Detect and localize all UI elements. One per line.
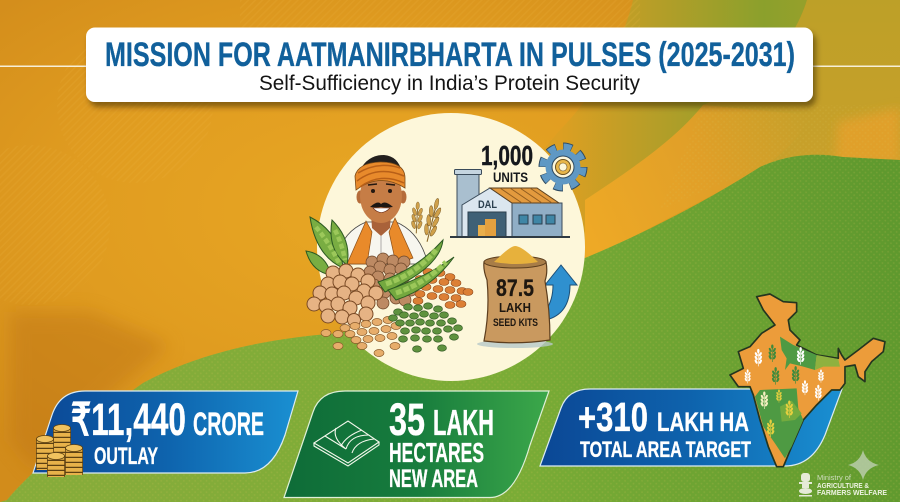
hectares label: HECTARES <box>389 437 484 468</box>
map: green southern zone <box>755 388 803 458</box>
seed kit label: SEED KITS <box>493 317 538 329</box>
map: light green central patch <box>780 401 802 422</box>
outlay amount: ₹11,440 <box>71 394 186 445</box>
factory: 1,000 dal units <box>450 140 583 238</box>
green mung beans <box>388 303 462 352</box>
icon: gold coin stacks <box>36 424 82 477</box>
panel: total area target <box>540 389 842 466</box>
target label: TOTAL AREA TARGET <box>580 437 751 462</box>
icon: left pod seeds <box>316 227 345 263</box>
title banner <box>86 28 813 102</box>
map: green northern zone <box>780 337 817 370</box>
icon: right pods <box>378 240 454 300</box>
DAL label: DAL <box>478 199 497 211</box>
tan small lentils <box>321 316 401 356</box>
panel: outlay <box>33 391 298 477</box>
ministry name line 2: AGRICULTURE & <box>817 483 869 490</box>
units count: 1,000 <box>481 140 533 171</box>
brown pulses <box>364 253 417 309</box>
seed kit unit: LAKH <box>499 300 531 315</box>
outlay label: OUTLAY <box>94 443 158 470</box>
panel: new area <box>284 391 549 498</box>
seed mound <box>494 246 538 264</box>
seed kit sack <box>477 246 577 348</box>
icon: national emblem <box>799 473 812 496</box>
new area unit: LAKH <box>433 402 494 443</box>
farmer illustration <box>338 155 428 264</box>
icon: right pod seeds <box>386 250 446 293</box>
outlay unit: CRORE <box>193 406 264 442</box>
ministry logo <box>799 450 887 497</box>
chickpeas <box>307 264 383 326</box>
icon: growth arrow <box>545 265 577 320</box>
icon: wheat stalks <box>410 197 445 243</box>
header rule <box>0 66 900 67</box>
subtitle: Self-Sufficiency in India’s Protein Security <box>259 72 640 95</box>
icon: farmland plot <box>314 421 379 466</box>
icon: sparkle watermark <box>848 450 879 480</box>
units label: UNITS <box>493 169 528 185</box>
icon: gear <box>543 147 583 187</box>
orange lentils <box>409 268 473 308</box>
map of India with wheat markers <box>730 294 885 467</box>
target amount: +310 <box>578 394 648 440</box>
icon: left pods <box>306 217 348 275</box>
target unit: LAKH HA <box>657 407 749 437</box>
map: light green eastern zone <box>815 355 840 370</box>
icon: wheat markers <box>744 344 824 437</box>
factory building <box>462 188 512 237</box>
new area label: NEW AREA <box>389 465 478 493</box>
seed kit count: 87.5 <box>496 275 534 302</box>
central circle <box>317 113 585 381</box>
pulses pile with pea pods <box>306 217 473 356</box>
ministry name line 3: FARMERS WELFARE <box>817 490 887 497</box>
new area amount: 35 <box>389 394 425 445</box>
ministry name line 1: Ministry of <box>817 475 851 482</box>
silo <box>457 172 479 237</box>
